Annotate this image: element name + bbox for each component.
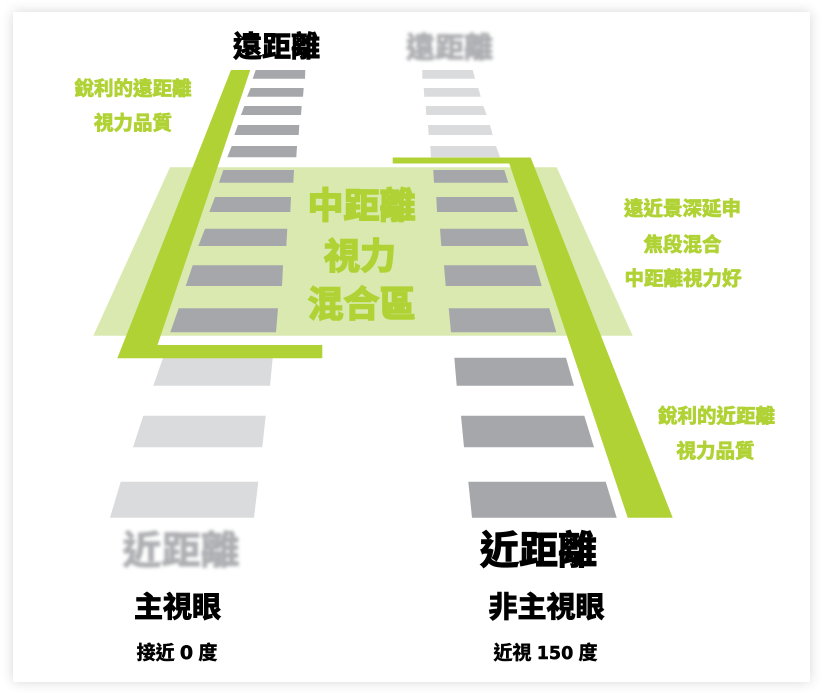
label: mid-distance blend zone: 混合區 bbox=[307, 284, 416, 324]
panel: mid-distance blend zone bbox=[93, 167, 633, 336]
caption: non-dominant eye: 非主視眼 bbox=[488, 591, 605, 624]
left eye stripes: near, blurred bbox=[110, 358, 273, 518]
label: sharp far vision: 銳利的遠距離 bbox=[74, 77, 192, 100]
label: depth of field: 焦段混合 bbox=[643, 233, 722, 256]
caption: non-dominant eye prescription: 近視 150 度 bbox=[493, 641, 598, 664]
caption: dominant eye: 主視眼 bbox=[134, 591, 221, 624]
label: mid-distance blend zone: 中距離 bbox=[307, 185, 416, 226]
heading: near distance, sharp: 近距離 bbox=[480, 530, 597, 573]
label: sharp far vision bbox=[74, 77, 192, 134]
right eye stripes: far, blurred bbox=[422, 70, 500, 157]
caption: dominant eye prescription: 接近 0 度 bbox=[137, 641, 217, 664]
heading: near distance, blurred: 近距離 bbox=[122, 530, 240, 573]
left eye stripes: far, sharp bbox=[170, 70, 305, 332]
label: depth of field: 遠近景深延申 bbox=[624, 198, 741, 220]
label: sharp near vision: 視力品質 bbox=[676, 440, 755, 462]
label: sharp near vision: 銳利的近距離 bbox=[658, 404, 775, 428]
left green bracket bbox=[117, 70, 322, 358]
label: depth of field: 中距離視力好 bbox=[624, 268, 742, 290]
right eye stripes: near, sharp bbox=[433, 170, 617, 518]
label: sharp far vision: 視力品質 bbox=[94, 112, 172, 134]
label: depth of field bbox=[624, 198, 742, 290]
label: mid-distance blend zone bbox=[307, 185, 416, 324]
label: mid-distance blend zone: 視力 bbox=[324, 236, 396, 276]
heading: far distance, blurred: 遠距離 bbox=[406, 32, 493, 64]
heading: far distance, sharp: 遠距離 bbox=[233, 30, 320, 64]
label: sharp near vision bbox=[658, 404, 775, 462]
right green bracket bbox=[393, 158, 673, 518]
